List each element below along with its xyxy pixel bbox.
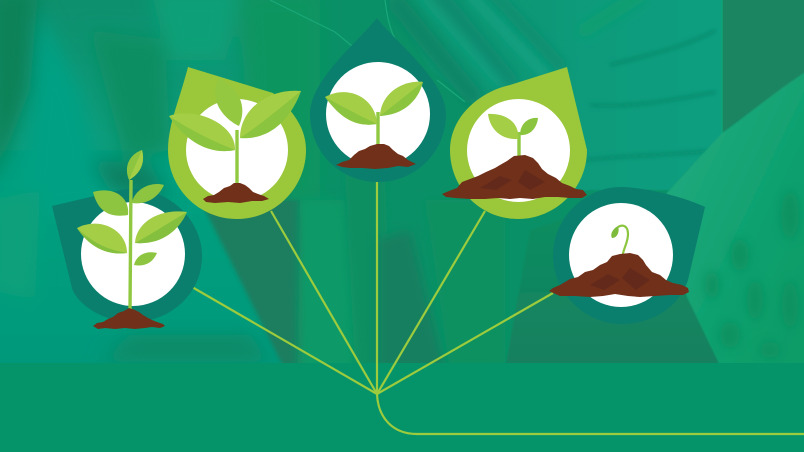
white circle <box>569 203 673 307</box>
stage: tall plant (left) <box>52 150 202 329</box>
stem <box>517 132 521 165</box>
sprout <box>618 226 628 262</box>
stem <box>376 112 380 148</box>
soil <box>549 253 689 297</box>
lime drop <box>168 67 306 219</box>
stem <box>235 130 239 186</box>
seed leaf <box>611 226 619 238</box>
soil <box>442 155 587 199</box>
top right dark panel <box>722 0 804 133</box>
leaves <box>488 114 538 139</box>
stage: sprout with two leaves <box>442 67 587 219</box>
right lower dark area <box>505 190 724 370</box>
big pale leaf <box>665 69 804 370</box>
leaves <box>325 82 423 125</box>
soil <box>336 144 416 169</box>
stage: germinating seed (right) <box>549 187 705 324</box>
teal drop <box>310 18 446 182</box>
diagonal ribs <box>398 0 640 95</box>
bottom band <box>0 363 804 452</box>
horizontal ribs <box>585 30 716 160</box>
left teal leaf <box>0 0 300 375</box>
connector lines <box>192 182 804 434</box>
leaves <box>169 78 301 151</box>
white circle <box>467 99 570 202</box>
white circle <box>326 62 430 166</box>
top right teal leaf <box>385 0 722 195</box>
stage: young plant with three leaves <box>168 67 306 219</box>
soil <box>93 308 165 329</box>
lime drop <box>450 67 587 219</box>
stage: seedling (center) <box>310 18 446 182</box>
soil <box>203 183 269 203</box>
white circle <box>81 202 185 306</box>
stem <box>130 180 131 312</box>
white circle <box>186 99 288 201</box>
leaves <box>77 150 187 265</box>
centre-lower dark area <box>200 200 310 370</box>
teal drop <box>52 189 202 322</box>
teal drop <box>553 187 705 324</box>
thin leaf veins <box>270 0 465 102</box>
